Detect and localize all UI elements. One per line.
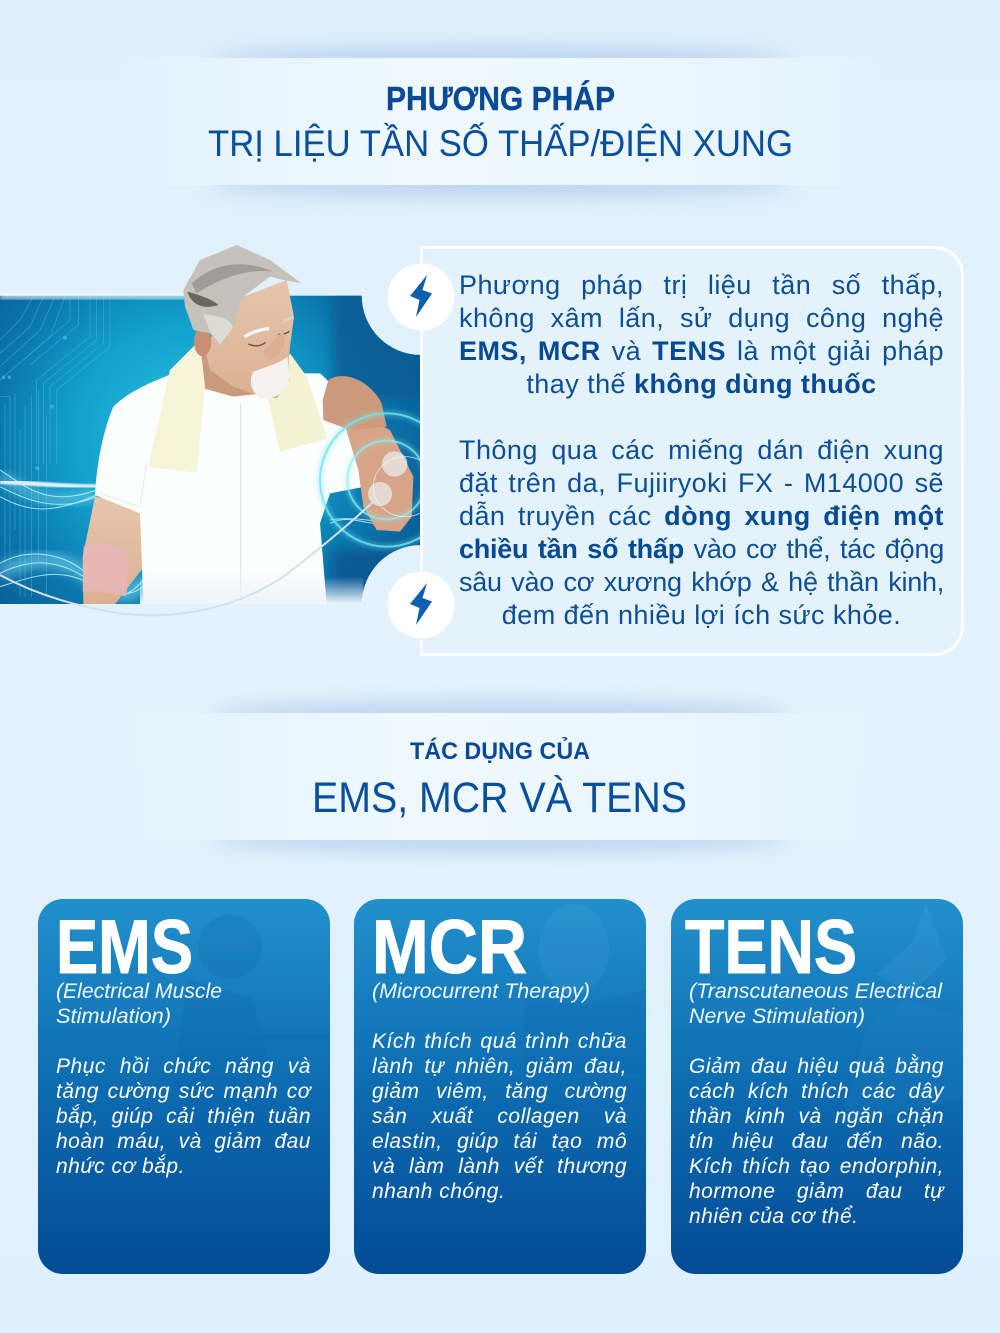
card body text: và làm lành vết thương (372, 1155, 627, 1178)
card body text: nhanh chóng. (372, 1180, 505, 1203)
card body text: elastin, giúp tái tạo mô (372, 1130, 627, 1153)
icon: lightning bolt top (388, 264, 454, 330)
card body text: giảm viêm, tăng cường (372, 1080, 627, 1103)
card subtitle: Stimulation) (56, 1005, 171, 1028)
dark corner shade (329, 296, 420, 401)
card subtitle: (Electrical Muscle (56, 980, 222, 1003)
card subtitle: (Transcutaneous Electrical (689, 980, 943, 1003)
paragraph: intro: EMS, MCR và TENS là một giải pháp (459, 336, 944, 366)
card subtitle: (Microcurrent Therapy) (372, 980, 590, 1003)
card title: MCR (372, 905, 527, 990)
heading band: phương pháp (208, 39, 793, 204)
card body text: thần kinh và ngăn chặn (689, 1105, 944, 1128)
paragraph: how it works: dẫn truyền các dòng xung điện một (459, 501, 944, 531)
ghost photo: woman touching face (524, 904, 646, 1074)
pulse rings (320, 413, 453, 547)
energy waves (0, 470, 393, 595)
left arm (83, 497, 147, 604)
card body text: hormone giảm đau tự (689, 1180, 944, 1203)
hair (183, 245, 302, 347)
heading band: tác dụng (218, 694, 782, 859)
circuit lines (0, 297, 110, 597)
shirt (95, 373, 365, 604)
card body text: sản xuất collagen và (372, 1105, 627, 1128)
card body text: Kích thích tạo endorphin, (689, 1155, 944, 1178)
paragraph: how it works: sâu vào cơ xương khớp & hệ thần kinh, (459, 567, 944, 597)
card title: TENS (685, 905, 857, 990)
card body text (372, 1030, 627, 1203)
card body text: Giảm đau hiệu quả bằng (689, 1055, 944, 1078)
card body text: Phục hồi chức năng và (56, 1055, 311, 1078)
heading line 2: TRỊ LIỆU TẦN SỐ THẤP/ĐIỆN XUNG (208, 122, 793, 164)
card body text: nhiên của cơ thể. (689, 1205, 858, 1228)
paragraph: how it works: đặt trên da, Fujiiryoki FX - M14000 sẽ (459, 468, 944, 498)
paragraph: intro: không xâm lấn, sử dụng công nghệ (459, 303, 944, 333)
soft white edge top (0, 294, 267, 299)
icon: lightning bolt bottom (388, 572, 454, 638)
paragraph: how it works: đem đến nhiều lợi ích sức khỏe. (502, 600, 901, 630)
neck (202, 340, 287, 397)
paragraph: intro (459, 270, 944, 399)
heading line 1: PHƯƠNG PHÁP (386, 80, 615, 117)
paragraph: intro: Phương pháp trị liệu tần số thấp, (459, 270, 944, 300)
beard and moustache (251, 357, 290, 399)
nose (264, 330, 285, 360)
paragraph: how it works: Thông qua các miếng dán điện xung (459, 435, 944, 465)
ghost photo: hand on shoulder (841, 904, 963, 1124)
card body text (689, 1054, 945, 1228)
card body text: Kích thích quá trình chữa (372, 1030, 627, 1053)
white cable (0, 502, 373, 615)
card body text: tín hiệu đau đến não. (689, 1130, 944, 1153)
card body text (56, 1055, 312, 1178)
card body text: nhức cơ bắp. (56, 1155, 185, 1178)
card: TENS (671, 899, 963, 1274)
ghost photo: stretching person (173, 915, 330, 1154)
heading large: EMS, MCR VÀ TENS (312, 774, 687, 822)
card body text: cách kích thích các dây (689, 1080, 944, 1103)
paragraph: intro: thay thế không dùng thuốc (526, 369, 877, 399)
card title: EMS (56, 905, 193, 990)
paragraph: how it works (459, 435, 944, 630)
eyebrow and eye (244, 329, 269, 337)
blue background panel (0, 296, 420, 604)
energy wave glow (0, 477, 97, 499)
photo: older man with towel and electric pulse rings (0, 245, 420, 616)
towel (148, 345, 205, 473)
card body text: lành tự nhiên, giảm đau, (372, 1055, 627, 1078)
electrode pads (382, 451, 407, 477)
bottom fade (140, 577, 363, 604)
card body text: hoàn máu, và giảm đau (56, 1130, 311, 1153)
fist (323, 376, 387, 430)
card body text: bắp, giúp cải thiện tuần (56, 1105, 311, 1128)
text panel: description (420, 246, 964, 656)
paragraph: how it works: chiều tần số thấp vào cơ thể, tác động (459, 534, 944, 564)
card subtitle: Nerve Stimulation) (689, 1005, 865, 1028)
man (83, 245, 413, 604)
right arm (343, 420, 413, 532)
card: MCR (354, 899, 646, 1274)
ear (194, 327, 211, 356)
face (203, 280, 294, 398)
card body text: tăng cường sức mạnh cơ (56, 1080, 311, 1103)
heading small: TÁC DỤNG CỦA (410, 736, 590, 765)
card: EMS (38, 899, 330, 1274)
